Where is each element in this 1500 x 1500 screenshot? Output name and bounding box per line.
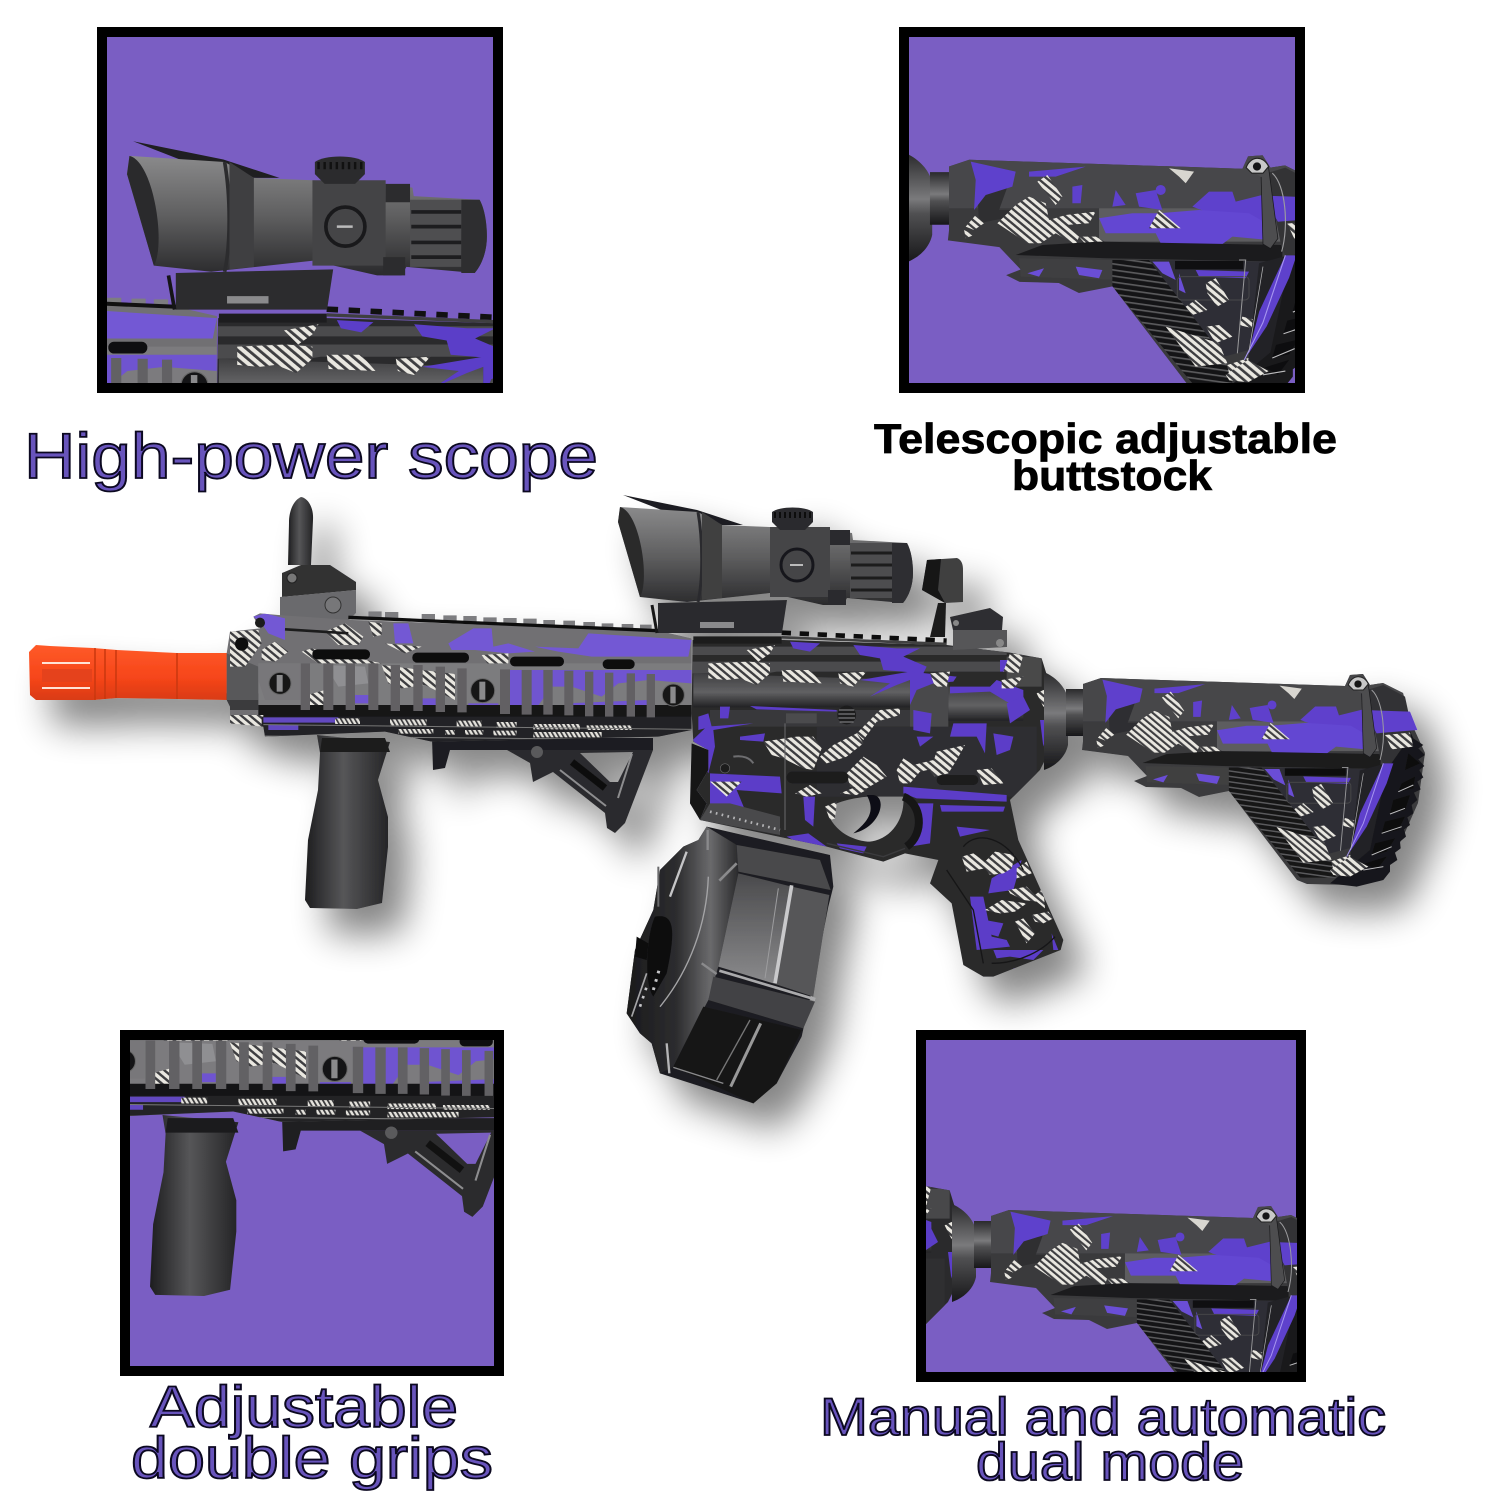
receiver and pistol grip (690, 633, 1063, 977)
handguard (225, 611, 692, 742)
panel: high-power scope (97, 27, 503, 393)
heading: adjustable double grips (131, 1375, 493, 1491)
buttstock (1044, 669, 1425, 887)
buttstock close-up (909, 154, 1295, 383)
scope (618, 495, 913, 633)
panel: manual and automatic dual mode (916, 1030, 1306, 1382)
rear sight (922, 558, 1007, 650)
heading: manual and automatic dual mode (820, 1388, 1386, 1492)
heading: telescopic adjustable buttstock (874, 415, 1337, 499)
vertical and angled foregrips (305, 735, 653, 909)
drum magazine (627, 827, 833, 1103)
scope close-up (107, 141, 493, 383)
stock close-up (926, 1186, 1297, 1372)
main gun (29, 495, 1425, 1103)
panel: telescopic buttstock (509, 32, 1332, 494)
panel: adjustable double grips (67, 986, 552, 1371)
heading: adjustable double grips: Adjustable (150, 1375, 458, 1440)
heading: high-power scope: High-power scope (24, 420, 598, 492)
heading: manual and automatic dual mode: dual mode (976, 1433, 1244, 1492)
heading: telescopic adjustable buttstock: Telescopic adjustable (874, 415, 1337, 462)
front sight (280, 497, 356, 620)
grips close-up (130, 1040, 494, 1296)
heading: telescopic adjustable buttstock: buttstock (1012, 452, 1213, 499)
muzzle tip (29, 645, 229, 700)
heading: adjustable double grips: double grips (131, 1426, 493, 1491)
heading: manual and automatic dual mode: Manual and automatic (820, 1388, 1386, 1447)
